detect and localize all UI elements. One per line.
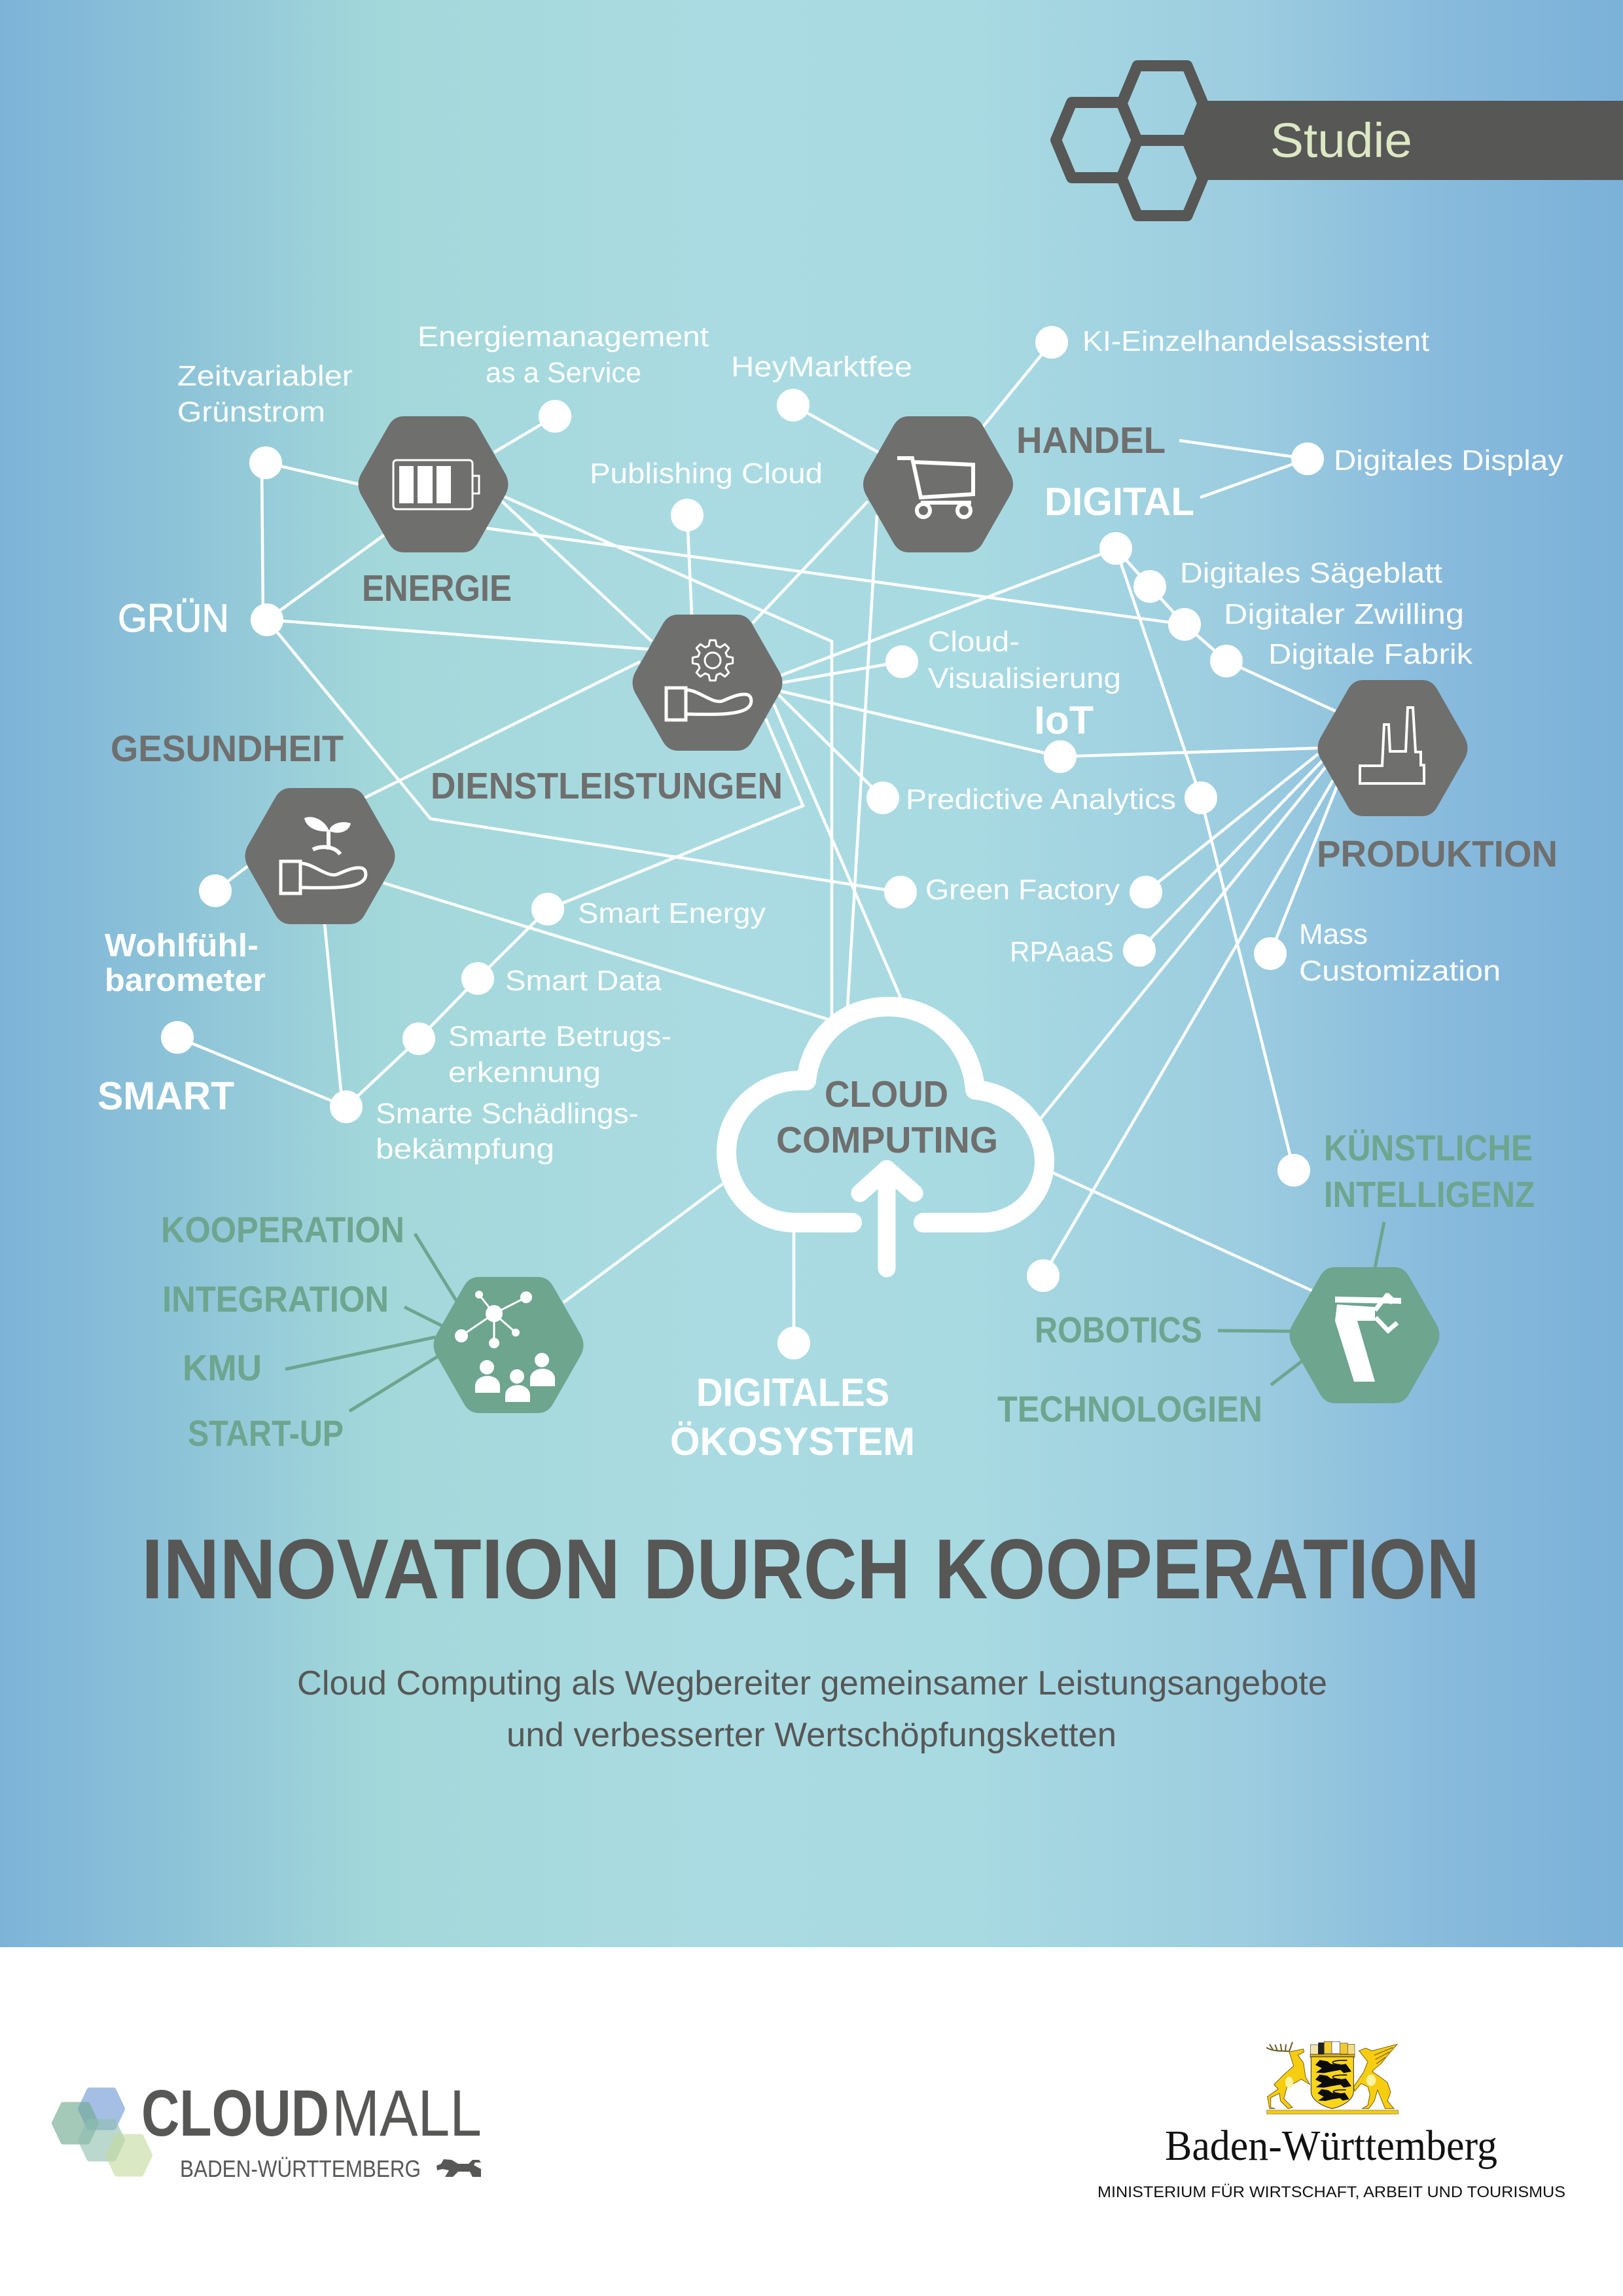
label: Energiemanagement as a Service: Energiemanagement bbox=[418, 321, 709, 353]
label: Mass Customization: Mass bbox=[1299, 918, 1368, 950]
label: Cloud-Visualisierung: Visualisierung bbox=[928, 662, 1121, 694]
label: Wohlfühlbarometer bbox=[105, 928, 266, 998]
label: cloud computing: COMPUTING bbox=[776, 1119, 998, 1161]
label: Energiemanagement as a Service: as a Service bbox=[486, 357, 641, 389]
heading: Digital: DIGITAL bbox=[1044, 480, 1194, 524]
heading: IoT: IoT bbox=[1034, 698, 1094, 742]
cloud computing icon bbox=[726, 1007, 1044, 1268]
icon: lion bbox=[437, 2159, 481, 2177]
logo: Cloudmall Baden-Württemberg: MALL bbox=[332, 2077, 482, 2150]
label: KI-Einzelhandelsassistent: KI-Einzelhandelsassistent bbox=[1082, 325, 1429, 357]
icon: gear and hand bbox=[666, 640, 751, 720]
connector dots bbox=[161, 326, 1324, 1359]
label: Smarte Betrugserkennung: erkennung bbox=[448, 1056, 601, 1088]
network connection lines bbox=[177, 342, 1337, 1343]
label: Smart Energy: Smart Energy bbox=[578, 897, 766, 929]
logo: Cloudmall Baden-Württemberg: BADEN-WÜRTTEMBERG bbox=[180, 2155, 421, 2182]
heading: Dienstleistungen: DIENSTLEISTUNGEN bbox=[431, 765, 783, 807]
logo: Land Baden-Württemberg: Baden-Württemberg bbox=[1165, 2122, 1497, 2170]
hub: Kooperation bbox=[433, 1277, 584, 1413]
heading: Künstliche Intelligenz bbox=[1324, 1127, 1535, 1215]
heading: Produktion: PRODUKTION bbox=[1317, 833, 1558, 875]
logo: Land Baden-Württemberg bbox=[1097, 2041, 1565, 2201]
hub: Künstliche Intelligenz bbox=[1289, 1267, 1440, 1403]
heading: Energie: ENERGIE bbox=[362, 567, 512, 609]
label: Kooperation: KOOPERATION bbox=[161, 1209, 404, 1250]
header banner: Studie bbox=[1056, 65, 1623, 216]
label: Smart Data: Smart Data bbox=[505, 965, 662, 997]
label: Digitales Display: Digitales Display bbox=[1334, 444, 1563, 476]
icon: robot arm bbox=[1335, 1293, 1401, 1382]
heading: Künstliche Intelligenz: KÜNSTLICHE bbox=[1324, 1127, 1533, 1168]
label: HeyMarktfee: HeyMarktfee bbox=[731, 351, 912, 383]
green connector lines bbox=[285, 1222, 1384, 1411]
icon: shopping cart bbox=[897, 458, 973, 517]
label: Wohlfühlbarometer: barometer bbox=[105, 963, 266, 998]
logo: Cloudmall Baden-Württemberg bbox=[55, 2077, 482, 2182]
logo: Cloudmall Baden-Württemberg: CLOUD bbox=[141, 2077, 329, 2150]
label: cloud computing bbox=[776, 1073, 998, 1161]
label: Mass Customization: Customization bbox=[1299, 955, 1501, 987]
label: Technologien: TECHNOLOGIEN bbox=[997, 1388, 1262, 1429]
label: Energiemanagement as a Service bbox=[418, 321, 709, 389]
hub: Gesundheit bbox=[245, 788, 395, 924]
icon: upload arrow bbox=[860, 1169, 914, 1268]
icon: sprout and hand bbox=[281, 817, 366, 893]
label: Zeitvariabler Grünstrom bbox=[177, 360, 353, 428]
label: Digitaler Zwilling: Digitaler Zwilling bbox=[1224, 598, 1464, 630]
subtitle: Cloud Computing als Wegbereiter gemeinsamer Leistungsangebote bbox=[297, 1664, 1327, 1702]
label: Green Factory: Green Factory bbox=[925, 874, 1120, 906]
label: cloud computing: CLOUD bbox=[825, 1073, 948, 1115]
label: KMU: KMU bbox=[183, 1347, 262, 1388]
subtitle: und verbesserter Wertschöpfungsketten bbox=[507, 1716, 1116, 1754]
hub: Handel bbox=[863, 416, 1013, 552]
label: Digitales Sägeblatt: Digitales Sägeblatt bbox=[1180, 557, 1442, 589]
label: Publishing Cloud: Publishing Cloud bbox=[590, 457, 823, 490]
icon: battery bbox=[393, 460, 479, 509]
hub: Energie bbox=[359, 416, 508, 552]
label: Integration: INTEGRATION bbox=[162, 1278, 389, 1319]
title: KOOPERATION bbox=[935, 1521, 1480, 1617]
label: Start-up: START-UP bbox=[188, 1412, 344, 1454]
label: Smarte Schädlingsbekämpfung bbox=[376, 1098, 639, 1165]
label: Smarte Schädlingsbekämpfung: bekämpfung bbox=[376, 1133, 554, 1165]
hub: Produktion bbox=[1318, 680, 1467, 816]
hub: Dienstleistungen bbox=[632, 615, 783, 751]
label: Smarte Schädlingsbekämpfung: Smarte Schädlings- bbox=[376, 1098, 639, 1130]
heading: Digitales Ökosystem bbox=[670, 1371, 915, 1463]
label: RPAaaS: RPAaaS bbox=[1010, 936, 1114, 968]
heading: Handel: HANDEL bbox=[1016, 420, 1166, 461]
label: Wohlfühlbarometer: Wohlfühl- bbox=[105, 928, 259, 963]
heading: Digitales Ökosystem: DIGITALES bbox=[696, 1371, 889, 1414]
heading: Digitales Ökosystem: ÖKOSYSTEM bbox=[670, 1420, 915, 1463]
coat of arms bbox=[1266, 2041, 1399, 2114]
heading: Gesundheit: GESUNDHEIT bbox=[111, 728, 344, 770]
label: Smarte Betrugserkennung: Smarte Betrugs- bbox=[448, 1020, 671, 1052]
label: Zeitvariabler Grünstrom: Grünstrom bbox=[177, 396, 325, 428]
title: INNOVATION bbox=[141, 1521, 620, 1617]
label: Zeitvariabler Grünstrom: Zeitvariabler bbox=[177, 360, 353, 392]
logo mark: overlapping hexagons bbox=[55, 2090, 149, 2173]
heading: Künstliche Intelligenz: INTELLIGENZ bbox=[1324, 1174, 1535, 1215]
icon: network and people bbox=[455, 1291, 555, 1402]
heading: Grün: GRÜN bbox=[118, 596, 229, 640]
label: Mass Customization bbox=[1299, 918, 1501, 987]
title: DURCH bbox=[643, 1521, 910, 1617]
label: Robotics: ROBOTICS bbox=[1035, 1309, 1202, 1350]
label: Cloud-Visualisierung: Cloud- bbox=[928, 626, 1020, 658]
label: Smarte Betrugserkennung bbox=[448, 1020, 671, 1088]
label: Digitale Fabrik: Digitale Fabrik bbox=[1268, 638, 1473, 670]
label: Predictive Analytics: Predictive Analytics bbox=[906, 783, 1176, 816]
title bbox=[141, 1521, 1480, 1617]
icon: factory bbox=[1360, 708, 1424, 783]
label: Cloud-Visualisierung bbox=[928, 626, 1121, 694]
heading: Smart: SMART bbox=[98, 1074, 234, 1118]
header banner: Studie: Studie bbox=[1270, 113, 1412, 168]
logo: Land Baden-Württemberg: MINISTERIUM FÜR WIRTSCHAFT, ARBEIT UND TOURISMUS bbox=[1097, 2183, 1565, 2201]
subtitle bbox=[297, 1664, 1327, 1754]
